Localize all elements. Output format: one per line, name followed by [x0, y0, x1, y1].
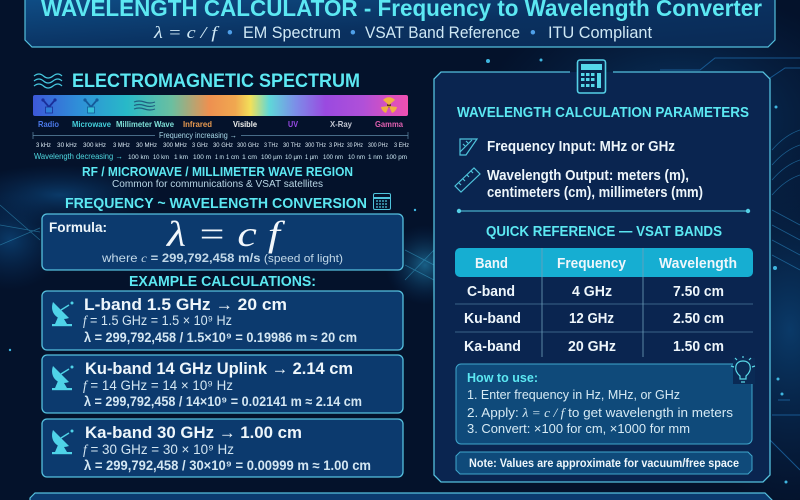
frequency ticks: 3 GHz	[192, 142, 208, 149]
speed of light note: where c = 299,792,458 m/s (speed of light)	[101, 251, 343, 265]
spectrum labels: Radio	[38, 119, 59, 129]
wavelength ticks: 100 m	[193, 154, 211, 161]
wavelength ticks	[34, 152, 407, 161]
panel: note: Note: Values are approximate for vacuum/free space	[469, 456, 739, 470]
wavelength ticks: 100 µm	[261, 154, 282, 161]
wavelength ticks: 1 cm	[242, 154, 257, 161]
header panel	[25, 0, 775, 47]
icon: satellite dish	[52, 430, 74, 454]
frequency axis: Frequency increasing →	[159, 131, 237, 140]
frequency ticks: 300 MHz	[163, 142, 187, 149]
how to use heading: How to use:	[467, 370, 538, 385]
icon: light bulb	[731, 356, 755, 384]
wavelength ticks: 10 µm	[285, 154, 302, 161]
table: VSAT bands: C-band	[467, 284, 515, 300]
panel: Ku-band example	[42, 355, 403, 413]
frequency ticks: 30 THz	[283, 142, 301, 149]
table: VSAT bands	[455, 248, 753, 357]
table: VSAT bands: 20 GHz	[568, 339, 616, 355]
panel: Ka-band example	[42, 419, 403, 477]
spectrum labels: Gamma	[375, 119, 403, 129]
wavelength ticks: 10 km	[153, 154, 169, 161]
region title: RF / MICROWAVE / MILLIMETER WAVE REGION	[82, 164, 353, 179]
panel: L-band example	[42, 291, 403, 350]
wavelength ticks: 1 km	[174, 154, 188, 161]
frequency input text: Frequency Input: MHz or GHz	[487, 139, 675, 155]
icon: radio antenna	[41, 98, 57, 113]
frequency ticks: 30 PHz	[347, 142, 363, 149]
panel: wavelength calculation parameters	[434, 60, 770, 482]
subtitle: λ = c / f	[153, 23, 220, 42]
Ka-band frequency: f = 30 GHz = 30 × 10⁹ Hz	[83, 442, 234, 457]
wavelength ticks: 100 km	[128, 154, 149, 161]
icon: millimeter wave	[134, 101, 155, 110]
divider	[457, 209, 750, 213]
table: VSAT bands: Ka-band	[464, 339, 521, 355]
icon: radiation	[381, 97, 397, 113]
heading: frequency wavelength conversion: FREQUENCY ~ WAVELENGTH CONVERSION	[65, 195, 367, 212]
wavelength ticks: 10 nm	[348, 154, 365, 161]
panel: bottom strip	[30, 493, 772, 500]
frequency ticks: 300 PHz	[368, 142, 388, 149]
frequency axis	[33, 131, 408, 140]
icon: satellite dish	[52, 302, 74, 326]
Ku-band wavelength: λ = 299,792,458 / 14×10⁹ = 0.02141 m ≈ 2.14 cm	[84, 394, 362, 409]
subtitle: •	[350, 24, 356, 42]
region subtitle: Common for communications & VSAT satellites	[112, 178, 323, 190]
subtitle: ITU Compliant	[548, 24, 652, 42]
table: VSAT bands: 1.50 cm	[673, 339, 724, 355]
wavelength output text: centimeters (cm), millimeters (mm)	[487, 185, 703, 201]
icon: waves	[34, 74, 62, 88]
subtitle: VSAT Band Reference	[365, 24, 520, 42]
wavelength ticks: 1 nm	[368, 154, 382, 161]
table: VSAT bands: Ku-band	[464, 311, 521, 327]
spectrum labels: Microwave	[72, 119, 111, 129]
wavelength ticks: 100 pm	[386, 154, 407, 161]
how to use steps: 1. Enter frequency in Hz, MHz, or GHz	[467, 387, 680, 402]
icon: frequency input	[460, 139, 477, 155]
frequency ticks: 3 THz	[264, 142, 278, 149]
L-band wavelength: λ = 299,792,458 / 1.5×10⁹ = 0.19986 m ≈ 20 cm	[84, 330, 357, 345]
panel heading: WAVELENGTH CALCULATION PARAMETERS	[457, 105, 749, 121]
frequency ticks: 3 kHz	[36, 142, 51, 149]
panel: electromagnetic spectrum	[33, 70, 409, 190]
how to use steps	[467, 387, 734, 436]
quick reference heading: QUICK REFERENCE — VSAT BANDS	[486, 224, 722, 240]
L-band title: L-band 1.5 GHz → 20 cm	[84, 296, 287, 314]
frequency ticks: 30 kHz	[57, 142, 77, 149]
frequency ticks: 300 THz	[305, 142, 326, 149]
panel: formula	[42, 214, 403, 270]
frequency ticks	[36, 142, 409, 149]
spectrum labels: X-Ray	[330, 119, 352, 129]
wavelength ticks: 1 cm	[226, 154, 239, 161]
wavelength output text	[487, 168, 703, 201]
wavelength ticks: 1 m	[215, 154, 224, 161]
formula: λ = c f	[166, 214, 286, 254]
formula label: Formula:	[49, 219, 107, 235]
frequency ticks: 3 PHz	[329, 142, 344, 149]
wavelength ticks: 100 nm	[323, 154, 343, 161]
subtitle: EM Spectrum	[243, 24, 341, 42]
table: VSAT bands: 4 GHz	[572, 284, 612, 300]
icon: small calculator	[374, 194, 390, 210]
Ka-band title: Ka-band 30 GHz → 1.00 cm	[85, 424, 302, 442]
table: VSAT bands: 2.50 cm	[673, 311, 724, 327]
frequency ticks: 30 MHz	[136, 142, 157, 149]
icon: microwave antenna	[83, 98, 99, 113]
frequency ticks: 300 kHz	[83, 142, 106, 149]
frequency ticks: 30 GHz	[213, 142, 233, 149]
frequency ticks: 3 MHz	[113, 142, 130, 149]
wavelength ticks: Wavelength decreasing →	[34, 152, 123, 161]
table: VSAT bands: 12 GHz	[569, 311, 614, 327]
table: VSAT bands: 7.50 cm	[673, 284, 724, 300]
spectrum labels: Millimeter Wave	[116, 119, 174, 129]
Ku-band frequency: f = 14 GHz = 14 × 10⁹ Hz	[83, 378, 233, 393]
spectrum bar	[33, 95, 408, 116]
how to use steps: 3. Convert: ×100 for cm, ×1000 for mm	[467, 421, 690, 436]
icon: satellite dish	[52, 366, 74, 390]
table: VSAT bands: Wavelength	[659, 256, 737, 272]
frequency ticks: 3 EHz	[394, 142, 409, 149]
frequency ticks: 300 GHz	[237, 142, 259, 149]
L-band frequency: f = 1.5 GHz = 1.5 × 10⁹ Hz	[83, 313, 232, 328]
table: VSAT bands: Band	[475, 256, 508, 272]
subtitle: •	[227, 24, 233, 42]
panel: note	[456, 452, 752, 474]
heading: ELECTROMAGNETIC SPECTRUM	[72, 70, 360, 92]
Ka-band wavelength: λ = 299,792,458 / 30×10⁹ = 0.00999 m ≈ 1.00 cm	[84, 458, 371, 473]
table: VSAT bands: Frequency	[557, 256, 626, 272]
wavelength ticks: 1 µm	[305, 154, 318, 161]
icon: ruler	[455, 168, 480, 192]
wavelength output text: Wavelength Output: meters (m),	[487, 168, 689, 184]
how to use steps: 2. Apply: λ = c / f to get wavelength in meters	[467, 405, 734, 420]
Ku-band title: Ku-band 14 GHz Uplink → 2.14 cm	[85, 360, 353, 378]
spectrum labels: UV	[288, 119, 298, 129]
subtitle	[153, 23, 652, 42]
spectrum labels	[38, 119, 403, 129]
spectrum labels: Infrared	[183, 119, 212, 129]
heading: example calculations: EXAMPLE CALCULATIONS:	[129, 274, 316, 290]
subtitle: •	[530, 24, 536, 42]
spectrum labels: Visible	[233, 119, 257, 129]
panel: how to use	[456, 356, 755, 444]
icon: calculator	[578, 60, 606, 93]
